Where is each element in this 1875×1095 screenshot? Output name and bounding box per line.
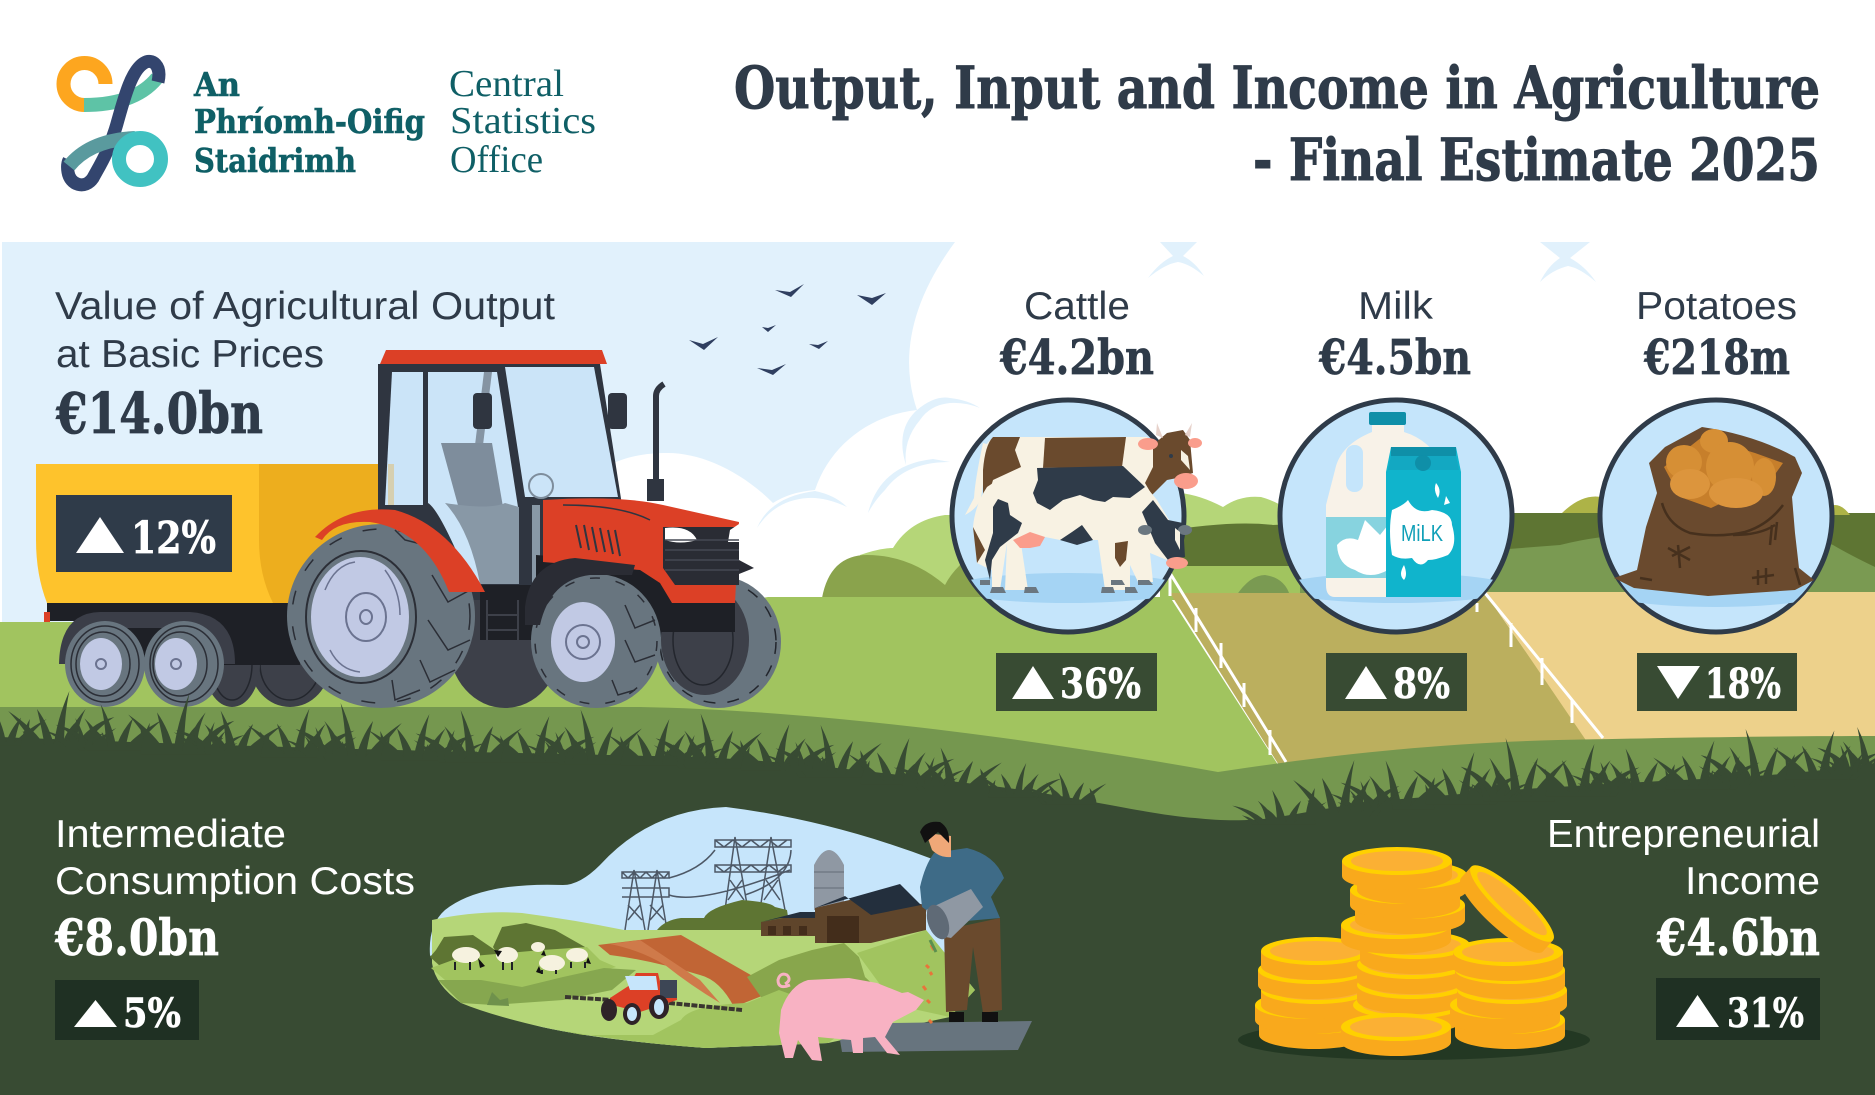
icon: milk jug and carton <box>1326 412 1461 597</box>
logo Irish text: Staidrimh <box>194 141 356 180</box>
logo Irish text <box>193 65 425 180</box>
logo <box>64 61 596 185</box>
small tractor with sprayer <box>565 973 742 1025</box>
badge: milk change <box>1326 653 1467 711</box>
logo mark <box>64 61 161 185</box>
logo English text: Central <box>449 63 564 105</box>
sheep <box>452 942 591 974</box>
output label: Value of Agricultural Output <box>55 285 555 328</box>
cattle value: €4.2bn <box>999 330 1154 386</box>
potatoes circle <box>1600 400 1832 632</box>
farmer <box>920 822 1004 1023</box>
landscape background <box>0 242 1875 830</box>
milk circle <box>1280 400 1512 632</box>
birds <box>689 284 886 375</box>
panel: potatoes <box>1600 285 1832 711</box>
logo English text: Statistics <box>450 100 596 142</box>
badge: costs change <box>55 980 199 1040</box>
icon: cows <box>965 423 1202 593</box>
sky blob <box>430 807 960 1048</box>
logo Irish text: Phríomh-Oifig <box>194 102 425 141</box>
fender <box>315 509 635 625</box>
output value: €14.0bn <box>55 381 263 447</box>
output label: at Basic Prices <box>56 333 324 376</box>
logo English text: Office <box>450 139 543 181</box>
trough <box>840 1021 1032 1052</box>
panel: milk <box>1280 285 1512 711</box>
badge: cattle change <box>996 653 1157 711</box>
milk label: Milk <box>1358 285 1434 328</box>
costs label: Intermediate <box>55 813 286 856</box>
hood <box>480 498 754 640</box>
output label <box>55 285 555 376</box>
badge: potatoes change: 18% <box>1705 660 1781 708</box>
exhaust <box>647 384 664 501</box>
costs label: Consumption Costs <box>55 860 415 903</box>
costs value: €8.0bn <box>54 908 219 967</box>
income value: €4.6bn <box>1656 908 1820 967</box>
cab <box>378 350 627 600</box>
tractor and trailer <box>36 350 781 708</box>
pig <box>778 974 924 1061</box>
panel: intermediate consumption costs <box>54 813 415 1040</box>
icon: potato sack <box>1614 427 1814 596</box>
dark grass foreground <box>0 691 1875 1095</box>
icon: milk jug and carton: MiLK <box>1401 520 1444 546</box>
income label: Entrepreneurial <box>1547 813 1820 856</box>
logo English text <box>449 63 596 181</box>
cattle label: Cattle <box>1024 285 1130 328</box>
milk value: €4.5bn <box>1318 330 1471 386</box>
badge: cattle change: 36% <box>1060 660 1141 708</box>
panel: entrepreneurial income <box>1547 813 1820 1040</box>
income label: Income <box>1685 860 1820 903</box>
potatoes value: €218m <box>1643 330 1790 386</box>
panel: cattle <box>952 285 1202 711</box>
silo and barns <box>761 850 926 943</box>
far wheels <box>204 576 781 708</box>
front wheel <box>531 574 661 708</box>
income label <box>1547 813 1820 903</box>
costs label <box>55 813 415 903</box>
trailer <box>36 464 385 665</box>
illustration: farm scene <box>430 807 1032 1061</box>
badge: output change: 12% <box>131 513 216 564</box>
badge: output change <box>56 495 232 572</box>
potatoes label: Potatoes <box>1636 285 1797 328</box>
rear wheel <box>287 524 475 708</box>
cattle circle <box>952 400 1184 632</box>
hills and field <box>430 900 975 1048</box>
badge: potatoes change <box>1637 653 1797 711</box>
icon: coin stacks <box>1238 847 1590 1060</box>
panel: value of agricultural output <box>55 285 555 447</box>
pylons <box>622 837 791 930</box>
title <box>734 54 1820 194</box>
badge: costs change: 5% <box>123 990 181 1037</box>
crop fields <box>0 573 1875 830</box>
badge: milk change: 8% <box>1393 660 1450 708</box>
trailer wheels <box>65 621 224 707</box>
badge: income change <box>1656 978 1820 1040</box>
logo Irish text: An <box>193 65 240 104</box>
badge: income change: 31% <box>1727 990 1804 1037</box>
